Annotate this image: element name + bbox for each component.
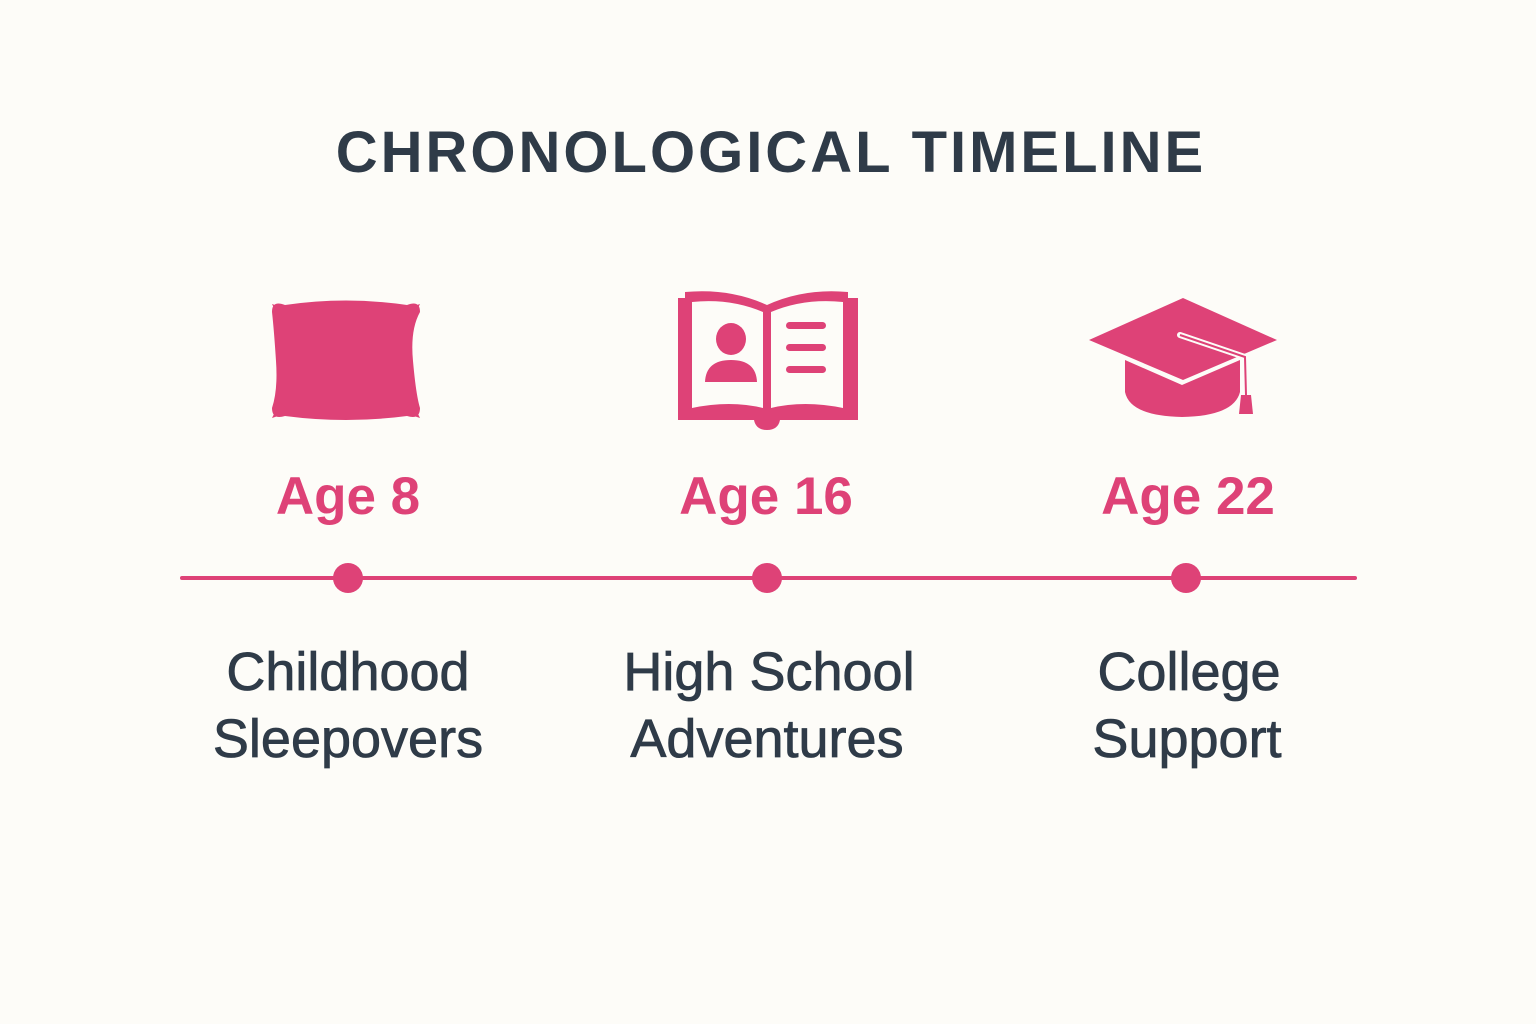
age labels [276, 467, 1275, 526]
icon: open book [678, 291, 858, 430]
milestone labels: Adventures [630, 709, 904, 769]
title: CHRONOLOGICAL TIMELINE [336, 120, 1206, 185]
milestone labels: High School [623, 642, 915, 702]
timeline line with dots [182, 563, 1355, 593]
milestone labels: Sleepovers [213, 709, 483, 769]
icon: graduation cap [1089, 298, 1277, 417]
milestone labels: Support [1092, 709, 1282, 769]
icon: pillow [272, 300, 420, 420]
age labels: Age 22 [1101, 467, 1275, 526]
milestone labels: Childhood [226, 642, 470, 702]
milestone labels [213, 642, 1282, 769]
milestone labels: College [1097, 642, 1281, 702]
age labels: Age 8 [276, 467, 420, 526]
age labels: Age 16 [679, 467, 853, 526]
